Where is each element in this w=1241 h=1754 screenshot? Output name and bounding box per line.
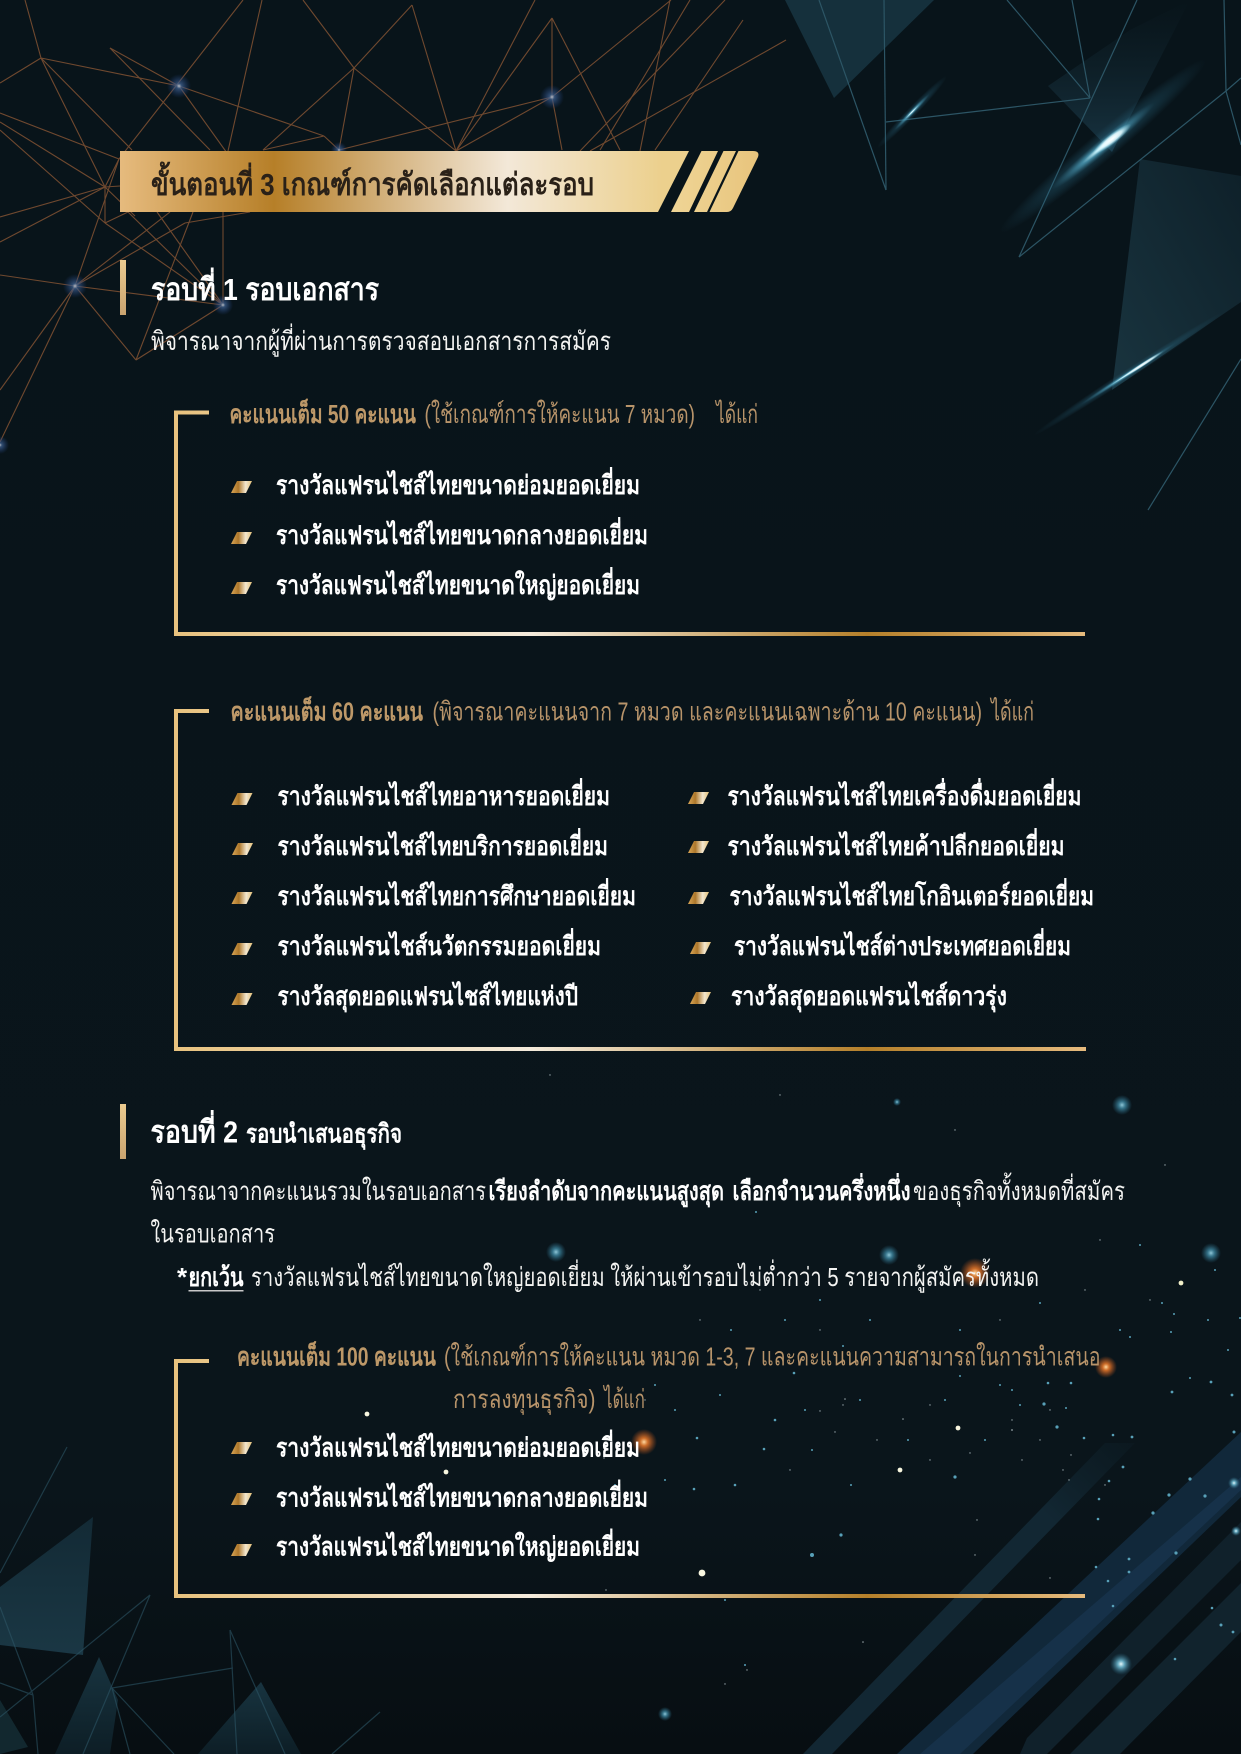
heading accent bar	[120, 1104, 126, 1159]
panel: 60 points	[176, 696, 1094, 1049]
list item	[231, 1428, 640, 1462]
list item	[231, 1528, 640, 1562]
list item: รางวัลสุดยอดแฟรนไชส์ไทยแห่งปี	[278, 980, 578, 1013]
title banner	[120, 151, 758, 212]
list item	[232, 877, 636, 911]
background: gold network lines	[0, 0, 786, 442]
heading subtext: รอบนำเสนอธุรกิจ	[246, 1118, 402, 1150]
panel heading: ได้แก่	[603, 1384, 645, 1414]
list item: รางวัลแฟรนไชส์ไทยค้าปลีกยอดเยี่ยม	[728, 827, 1064, 861]
round 2 description: เลือกจำนวนครึ่งหนึ่ง	[732, 1172, 910, 1206]
list item	[688, 777, 1082, 811]
banner slash 1	[671, 151, 718, 212]
list item: รางวัลแฟรนไชส์ไทยขนาดกลางยอดเยี่ยม	[276, 516, 648, 550]
list item	[690, 927, 1071, 961]
background: light flares	[874, 49, 1225, 439]
list item	[688, 877, 1094, 911]
panel heading	[230, 696, 1034, 726]
heading accent bar	[120, 260, 126, 315]
list item: รางวัลแฟรนไชส์ไทยขนาดกลางยอดเยี่ยม	[276, 1478, 648, 1512]
panel heading: คะแนนเต็ม 60 คะแนน	[230, 696, 423, 726]
heading text: รอบที่ 1 รอบเอกสาร	[151, 267, 379, 307]
panel heading	[237, 1340, 1100, 1415]
list item	[231, 516, 648, 550]
list item: รางวัลแฟรนไชส์ไทยการศึกษายอดเยี่ยม	[278, 877, 636, 911]
list item	[232, 777, 610, 811]
list item: รางวัลแฟรนไชส์ไทยบริการยอดเยี่ยม	[278, 827, 608, 861]
list item: รางวัลแฟรนไชส์ไทยโกอินเตอร์ยอดเยี่ยม	[730, 877, 1094, 911]
list item	[688, 827, 1064, 861]
panel heading: (พิจารณาคะแนนจาก 7 หมวด และคะแนนเฉพาะด้าน 10 คะแนน)	[432, 696, 982, 726]
list item: รางวัลแฟรนไชส์ต่างประเทศยอดเยี่ยม	[734, 927, 1071, 961]
background: bottom-left shards	[0, 1447, 380, 1754]
exception note: ยกเว้น	[188, 1262, 244, 1292]
list item: รางวัลสุดยอดแฟรนไชส์ดาวรุ่ง	[731, 980, 1007, 1013]
panel heading: ได้แก่	[990, 696, 1034, 726]
list item: รางวัลแฟรนไชส์ไทยขนาดใหญ่ยอดเยี่ยม	[276, 566, 640, 601]
round 1 heading	[120, 260, 379, 315]
round 1 description: พิจารณาจากผู้ที่ผ่านการตรวจสอบเอกสารการสมัคร	[151, 323, 611, 357]
background: network star glows	[0, 74, 564, 454]
list item	[232, 980, 578, 1013]
list item	[231, 466, 640, 500]
panel heading: ได้แก่	[715, 399, 758, 429]
banner slash 2	[694, 151, 736, 212]
panel heading: คะแนนเต็ม 50 คะแนน	[230, 398, 416, 429]
panel: 100 points	[176, 1340, 1100, 1596]
round 2 description: พิจารณาจากคะแนนรวมในรอบเอกสาร	[150, 1176, 486, 1206]
background: top-right teal shards	[785, 0, 1241, 510]
list item	[231, 1478, 648, 1512]
panel heading: คะแนนเต็ม 100 คะแนน	[237, 1340, 436, 1372]
list item: รางวัลแฟรนไชส์ไทยขนาดย่อมยอดเยี่ยม	[276, 466, 640, 500]
round 2 description: ในรอบเอกสาร	[150, 1218, 275, 1248]
round 2 description: ของธุรกิจทั้งหมดที่สมัคร	[913, 1172, 1125, 1207]
panel heading: การลงทุนธุรกิจ)	[453, 1384, 596, 1415]
exception note	[177, 1258, 1039, 1293]
banner slash 3	[710, 151, 758, 212]
panel heading	[230, 398, 758, 429]
list item: รางวัลแฟรนไชส์ไทยอาหารยอดเยี่ยม	[278, 777, 610, 811]
panel bracket	[176, 412, 1085, 634]
panel heading: (ใช้เกณฑ์การให้คะแนน 7 หมวด)	[424, 399, 695, 429]
exception note: *	[177, 1262, 188, 1292]
list item	[231, 566, 640, 601]
panel bracket	[176, 1361, 1085, 1596]
background: star field	[365, 1074, 1241, 1721]
round 2 description	[150, 1172, 1125, 1248]
list item: รางวัลแฟรนไชส์ไทยขนาดย่อมยอดเยี่ยม	[276, 1428, 640, 1462]
panel: 50 points	[176, 398, 1085, 634]
background: bottom-right diagonal bands	[803, 1432, 1241, 1754]
round 2 description: เรียงลำดับจากคะแนนสูงสุด	[488, 1176, 724, 1208]
exception note: รางวัลแฟรนไชส์ไทยขนาดใหญ่ยอดเยี่ยม ให้ผ่านเข้ารอบไม่ต่ำกว่า 5 รายจากผู้สมัครทั้งหมด	[251, 1258, 1039, 1293]
list item	[232, 927, 601, 961]
list item: รางวัลแฟรนไชส์ไทยเครื่องดื่มยอดเยี่ยม	[728, 777, 1082, 811]
list item: รางวัลแฟรนไชส์นวัตกรรมยอดเยี่ยม	[278, 927, 601, 961]
heading text: รอบที่ 2	[150, 1110, 238, 1150]
list item	[232, 827, 608, 861]
panel bracket	[176, 711, 1086, 1049]
banner title: ขั้นตอนที่ 3 เกณฑ์การคัดเลือกแต่ละรอบ	[151, 161, 594, 202]
list item	[690, 980, 1007, 1013]
round 2 heading	[120, 1104, 402, 1159]
banner bar	[120, 151, 689, 212]
list item: รางวัลแฟรนไชส์ไทยขนาดใหญ่ยอดเยี่ยม	[276, 1528, 640, 1562]
